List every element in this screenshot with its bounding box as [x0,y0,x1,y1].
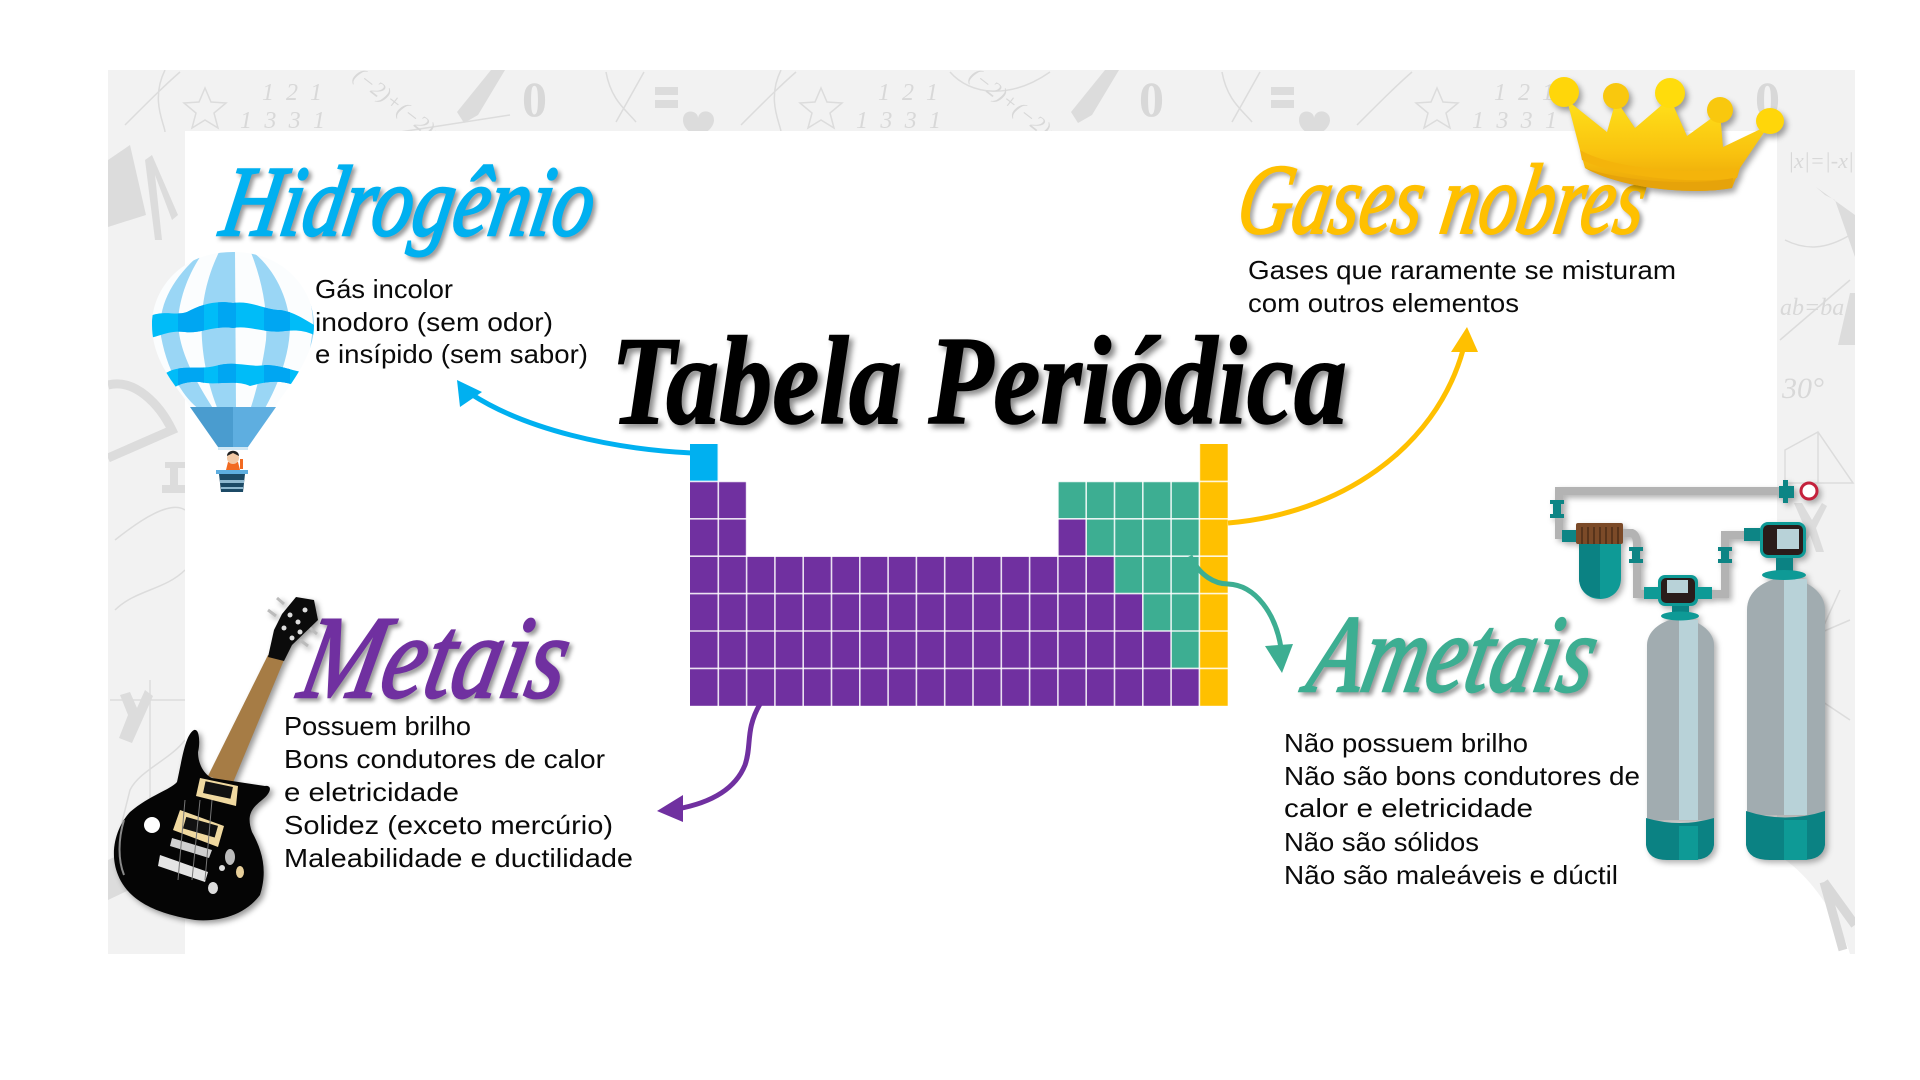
text: Hidrogênio properties: e insípido (sem sabor) [315,339,588,369]
text: Metais properties: Bons condutores de calor [284,744,605,774]
background frame with math doodles: 1 2 1 [1494,80,1554,106]
background frame with math doodles: 0 [522,71,547,127]
text: Metais properties [284,711,633,873]
background frame with math doodles: 1 3 3 1 [856,108,941,134]
text: Ametais properties: Não são bons condutores de [1284,761,1640,791]
background frame with math doodles: 1 2 1 [878,80,938,106]
text: Hidrogênio properties: inodoro (sem odor) [315,307,553,337]
arrow: table to Ametais [1190,556,1293,673]
background frame with math doodles [108,62,1855,954]
text: Hidrogênio properties [315,274,588,369]
main title: Tabela Periódica: Tabela Periódica [611,312,1347,451]
small cylinder [1644,575,1714,860]
background frame with math doodles: 0 [1139,71,1164,127]
heading: Ametais: Ametais [1293,594,1609,716]
background frame with math doodles: 30° [1781,372,1824,405]
arrow: table to Metais [657,704,760,822]
background frame with math doodles: 0 [1755,71,1780,127]
large cylinder [1746,522,1825,860]
heading: Hidrogênio: Hidrogênio [213,146,605,257]
heading: Gases nobres: Gases nobres [1230,144,1656,255]
text: Ametais properties [1284,728,1640,890]
arrow: table to Hidrogênio [457,380,692,453]
text: Metais properties: Solidez (exceto mercúrio) [284,810,613,840]
icon: hot air balloon [150,250,320,492]
background frame with math doodles: 1 3 3 1 [1472,108,1557,134]
text: Gases nobres description: Gases que raramente se misturam [1248,255,1676,285]
icon: golden crown [1549,77,1784,191]
text: Ametais properties: calor e eletricidade [1284,793,1533,823]
text: Metais properties: e eletricidade [284,777,459,807]
background frame with math doodles: 1 3 3 1 [240,108,325,134]
text: Ametais properties: Não possuem brilho [1284,728,1528,758]
text: Metais properties: Possuem brilho [284,711,471,741]
background frame with math doodles: (−2)+(−2)=4 [349,62,460,157]
text: Ametais properties: Não são maleáveis e dúctil [1284,860,1618,890]
heading: Metais: Metais [289,592,582,723]
arrow: table to Gases nobres [1228,327,1478,523]
background frame with math doodles: |x|=|-x| [1788,148,1854,173]
text: Gases nobres description [1248,255,1676,318]
text: Gases nobres description: com outros elementos [1248,288,1519,318]
text: Hidrogênio properties: Gás incolor [315,274,453,304]
icon: electric guitar [114,597,318,920]
text: Metais properties: Maleabilidade e ductilidade [284,843,633,873]
periodic table grid [690,444,1228,706]
icon: gas cylinders with pipes [1550,480,1825,860]
background frame with math doodles: ab=ba [1780,295,1844,321]
background frame with math doodles: 1 2 1 [262,80,322,106]
background frame with math doodles: (−2)+(−2)=4 [965,62,1076,157]
text: Ametais properties: Não são sólidos [1284,827,1479,857]
